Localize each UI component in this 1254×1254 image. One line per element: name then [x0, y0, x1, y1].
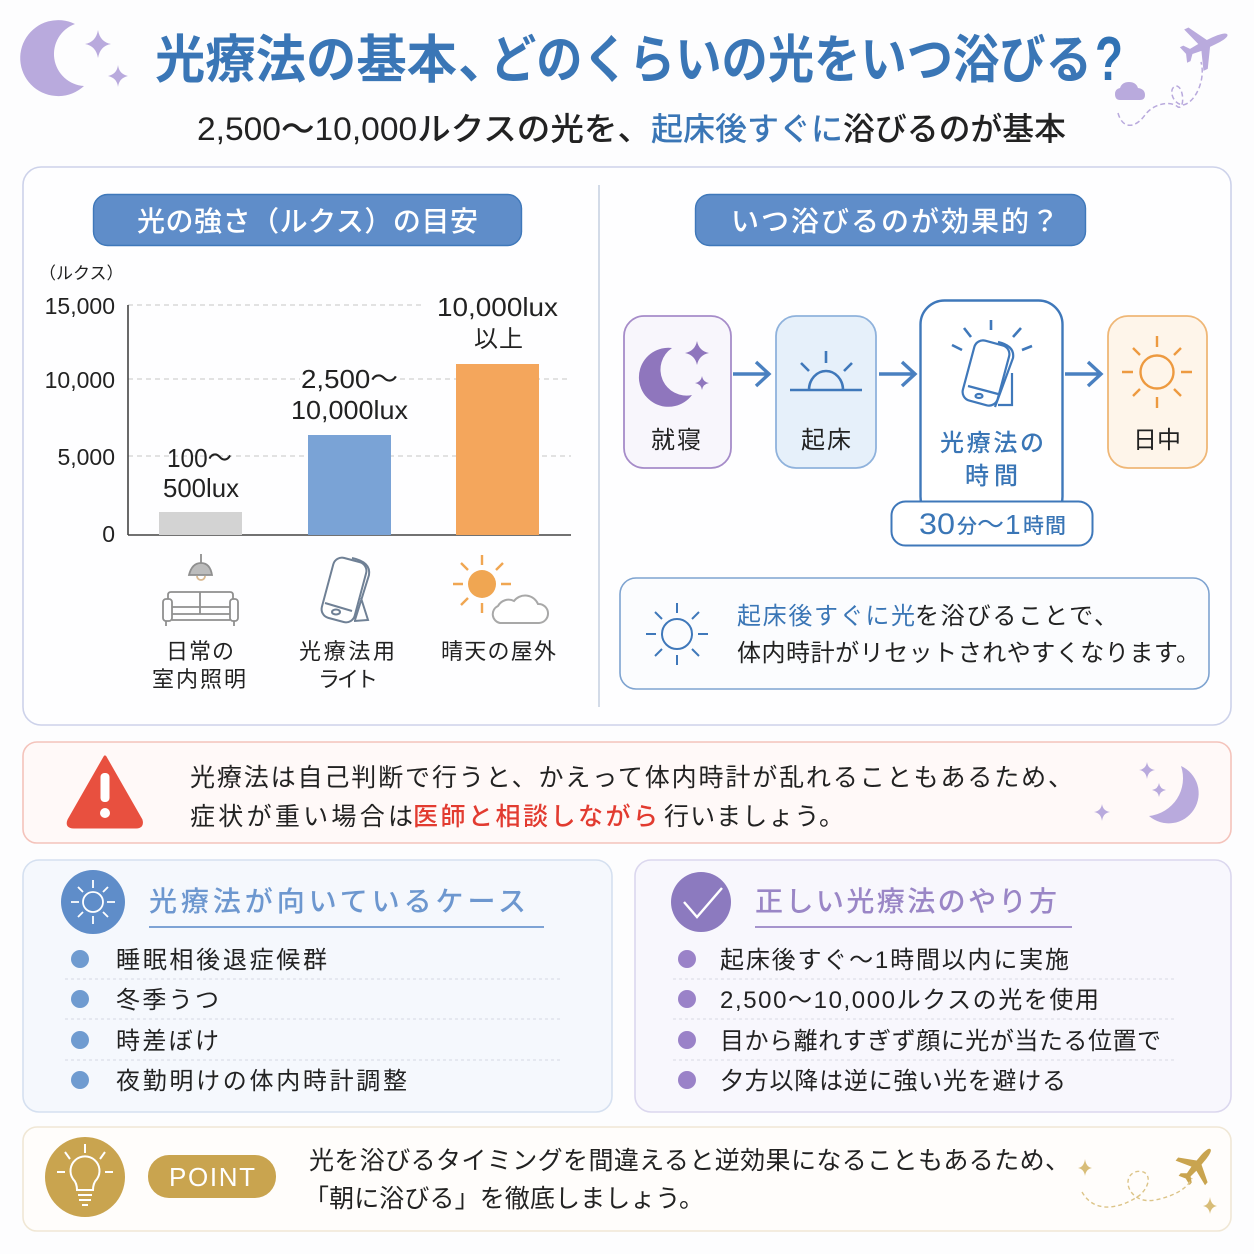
- timeline step: daytime: 日中: [1133, 420, 1181, 455]
- icon: plane with trail: [1078, 1137, 1225, 1214]
- axis unit: （ルクス）: [39, 259, 124, 284]
- icon: sun and cloud: [453, 555, 548, 623]
- callout: reset the body clock: を浴びることで、: [915, 596, 1118, 631]
- point text: 光を浴びるタイミングを間違えると逆効果になることもあるため、: [309, 1141, 1070, 1177]
- timeline step: bedtime: [624, 316, 731, 468]
- bar: indoor: [159, 512, 242, 535]
- bar value labels: [163, 292, 558, 503]
- panel: main card: [23, 167, 1231, 725]
- list: correct method: 起床後すぐ〜1時間以内に実施: [720, 947, 1069, 974]
- bar: therapy light: [308, 435, 391, 535]
- duration pill: 〜: [977, 503, 1004, 542]
- bar value labels: 100〜: [167, 443, 232, 473]
- list: suitable cases: 睡眠相後退症候群: [116, 940, 327, 975]
- bar value labels: 10,000lux: [437, 292, 558, 322]
- icon: check badge: [671, 872, 731, 932]
- bar value labels: 以上: [474, 319, 523, 354]
- icon: warning triangle: [68, 757, 141, 827]
- list: correct method: 2,500〜10,000ルクスの光を使用: [720, 987, 1099, 1014]
- bar value labels: 10,000lux: [291, 395, 408, 425]
- callout: reset the body clock: 体内時計がリセットされやすくなります。: [737, 633, 1200, 668]
- title: ?: [1095, 25, 1123, 94]
- arrow: [1065, 362, 1101, 386]
- axis labels: 10,000: [45, 367, 115, 393]
- icon: sun badge: [61, 870, 125, 934]
- panel: warning: 症状が重い場合は: [190, 797, 413, 833]
- icon: sun outline: [646, 603, 708, 665]
- subtitle: 2,500〜10,000ルクスの光を、: [197, 111, 651, 147]
- timeline step: wake up: [776, 316, 876, 468]
- title: どのくらいの光をいつ浴びる: [490, 18, 1092, 93]
- axis labels: 5,000: [57, 444, 115, 470]
- header decoration: moon and stars: [20, 20, 128, 96]
- panel: warning: 医師と相談しながら: [413, 797, 658, 833]
- list: correct method: 夕方以降は逆に強い光を避ける: [720, 1061, 1066, 1096]
- axis labels: 0: [102, 521, 115, 547]
- panel: point: 「朝に浴びる」を徹底しましょう。: [304, 1179, 704, 1215]
- heading: when effective: いつ浴びるのが効果的？: [731, 200, 1059, 240]
- panel: warning: [23, 742, 1231, 843]
- warning text: 光療法は自己判断で行うと、かえって体内時計が乱れることもあるため、: [190, 758, 1073, 794]
- subtitle: 起床後すぐに: [651, 104, 843, 150]
- icon labels: 室内照明: [152, 662, 246, 694]
- bar value labels: 500lux: [163, 473, 239, 503]
- icon: light bulb badge: [45, 1137, 125, 1217]
- list: suitable cases: 時差ぼけ: [116, 1021, 219, 1056]
- panel: point: [23, 1127, 1231, 1231]
- heading: suitable cases: 光療法が向いているケース: [149, 880, 526, 920]
- duration pill: 30: [919, 508, 955, 541]
- list: correct method: [678, 947, 1161, 1096]
- icon labels: 日常の: [166, 634, 234, 666]
- arrow: [879, 362, 915, 386]
- callout: reset the body clock: [620, 578, 1209, 689]
- timeline step: bedtime: 就寝: [651, 420, 701, 455]
- icon labels: 光療法用: [299, 634, 395, 666]
- timeline step: light therapy time: 光療法の: [940, 423, 1044, 458]
- title: 光療法の基本: [155, 18, 457, 93]
- list: suitable cases: 夜勤明けの体内時計調整: [116, 1061, 407, 1096]
- timeline step: daytime: [1108, 316, 1207, 468]
- heading: correct method: 正しい光療法のやり方: [755, 880, 1057, 920]
- list: correct method: 目から離れすぎず顔に光が当たる位置で: [720, 1021, 1161, 1056]
- badge: POINT: POINT: [169, 1162, 255, 1192]
- timeline step: light therapy time: 時間: [965, 456, 1018, 491]
- duration pill: 分: [957, 510, 977, 539]
- heading: when effective: [696, 194, 1086, 246]
- panel: warning: 行いましょう。: [664, 797, 844, 833]
- icon labels: ライト: [318, 662, 378, 694]
- subtitle: 浴びるのが基本: [843, 104, 1066, 150]
- badge: POINT: [148, 1155, 276, 1198]
- icon labels: 晴天の屋外: [441, 634, 556, 666]
- arrow: [733, 362, 769, 386]
- list: suitable cases: [71, 940, 407, 1096]
- list: suitable cases: 冬季うつ: [116, 980, 219, 1015]
- timeline step: light therapy time: [920, 300, 1062, 520]
- duration pill: [892, 502, 1092, 546]
- heading: lux guide: 光の強さ（ルクス）の目安: [137, 200, 478, 240]
- bar chart: lux by light source: [39, 259, 571, 547]
- subtitle: [197, 104, 1066, 150]
- title: 、: [458, 18, 510, 93]
- header decoration: plane, cloud and trail: [1115, 14, 1237, 125]
- axis labels: [45, 293, 115, 547]
- icon labels: [152, 634, 556, 694]
- duration pill: 時間: [1023, 510, 1066, 540]
- icon: therapy lamp grey: [320, 556, 369, 624]
- title: [155, 18, 1123, 94]
- duration pill: 1: [1005, 509, 1021, 540]
- heading: lux guide: [94, 194, 522, 246]
- icon: lamp and sofa: [163, 554, 238, 626]
- bar value labels: 2,500〜: [301, 364, 398, 394]
- bar: outdoors: [456, 364, 539, 535]
- axis labels: 15,000: [45, 293, 115, 319]
- timeline step: wake up: 起床: [801, 420, 851, 455]
- panel: correct method: [635, 860, 1231, 1112]
- icon: moon and stars: [1094, 762, 1199, 823]
- panel: suitable cases: [23, 860, 612, 1112]
- icon: therapy lamp blue: [952, 320, 1032, 408]
- callout: reset the body clock: 起床後すぐに光: [737, 596, 915, 631]
